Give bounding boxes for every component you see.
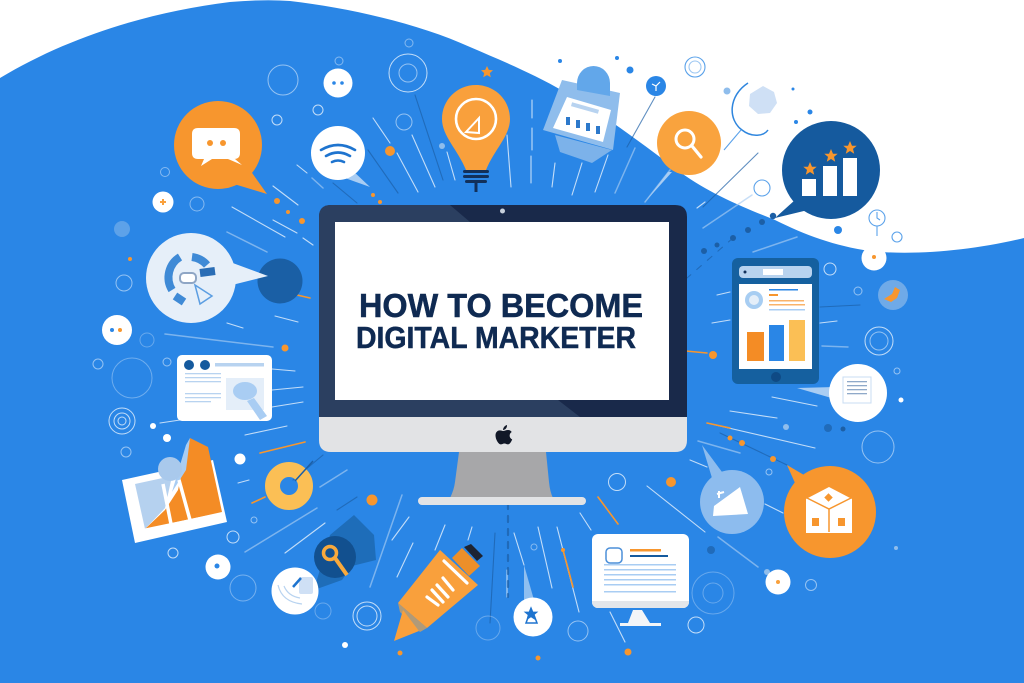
monitor chin — [319, 417, 687, 452]
icon: apple logo — [496, 425, 512, 444]
monitor bezel — [319, 205, 687, 417]
monitor stand — [450, 452, 553, 498]
title text: DIGITAL MARKETER — [356, 321, 636, 355]
icon: white compass badge — [272, 568, 318, 614]
icon: dark magnifier with orange key — [314, 515, 376, 590]
icon: document bubble — [797, 364, 887, 422]
small decorative dots — [114, 56, 904, 660]
icon: rating bubble with stars — [775, 121, 880, 219]
monitor base — [418, 497, 586, 505]
icon: puzzle badge — [878, 280, 908, 310]
icon: yellow donut — [272, 461, 313, 502]
card: browser window — [177, 355, 272, 421]
icon: dots badge left — [102, 315, 132, 345]
icon: small orange dot badge bottom right — [766, 570, 790, 594]
icon: smart watch dashboard — [543, 66, 620, 163]
icon: white ring badge — [206, 554, 230, 580]
card: rising area chart — [122, 438, 227, 543]
title text: HOW TO BECOME — [359, 288, 643, 325]
icon: chat speech bubble — [174, 101, 267, 194]
icon: small plus badge — [152, 192, 174, 212]
card: small monitor with article — [592, 534, 689, 626]
decorative outline circles — [93, 39, 900, 641]
computer monitor — [319, 205, 687, 505]
icon: white star badge — [514, 565, 552, 636]
icon: analytics bubble with dark blob — [146, 233, 302, 323]
icon: blue pin — [646, 76, 666, 96]
radiating rays — [160, 95, 860, 642]
icon: white dots badge — [324, 68, 352, 98]
monitor screen — [335, 222, 669, 400]
card: tablet bar chart — [732, 258, 819, 384]
icon: gear — [749, 86, 777, 114]
icon: light bulb with gauge — [442, 85, 510, 192]
icon: magnifier circle — [645, 111, 721, 202]
icon: wifi bubble — [311, 126, 370, 187]
icon: orange box bubble — [784, 465, 876, 558]
title text — [356, 288, 643, 355]
icon: megaphone bubble — [700, 445, 764, 534]
outline circles on the white area — [685, 57, 902, 242]
icon: small white orange dot badge top right — [862, 246, 886, 270]
icon: orange marker pen — [394, 544, 483, 641]
